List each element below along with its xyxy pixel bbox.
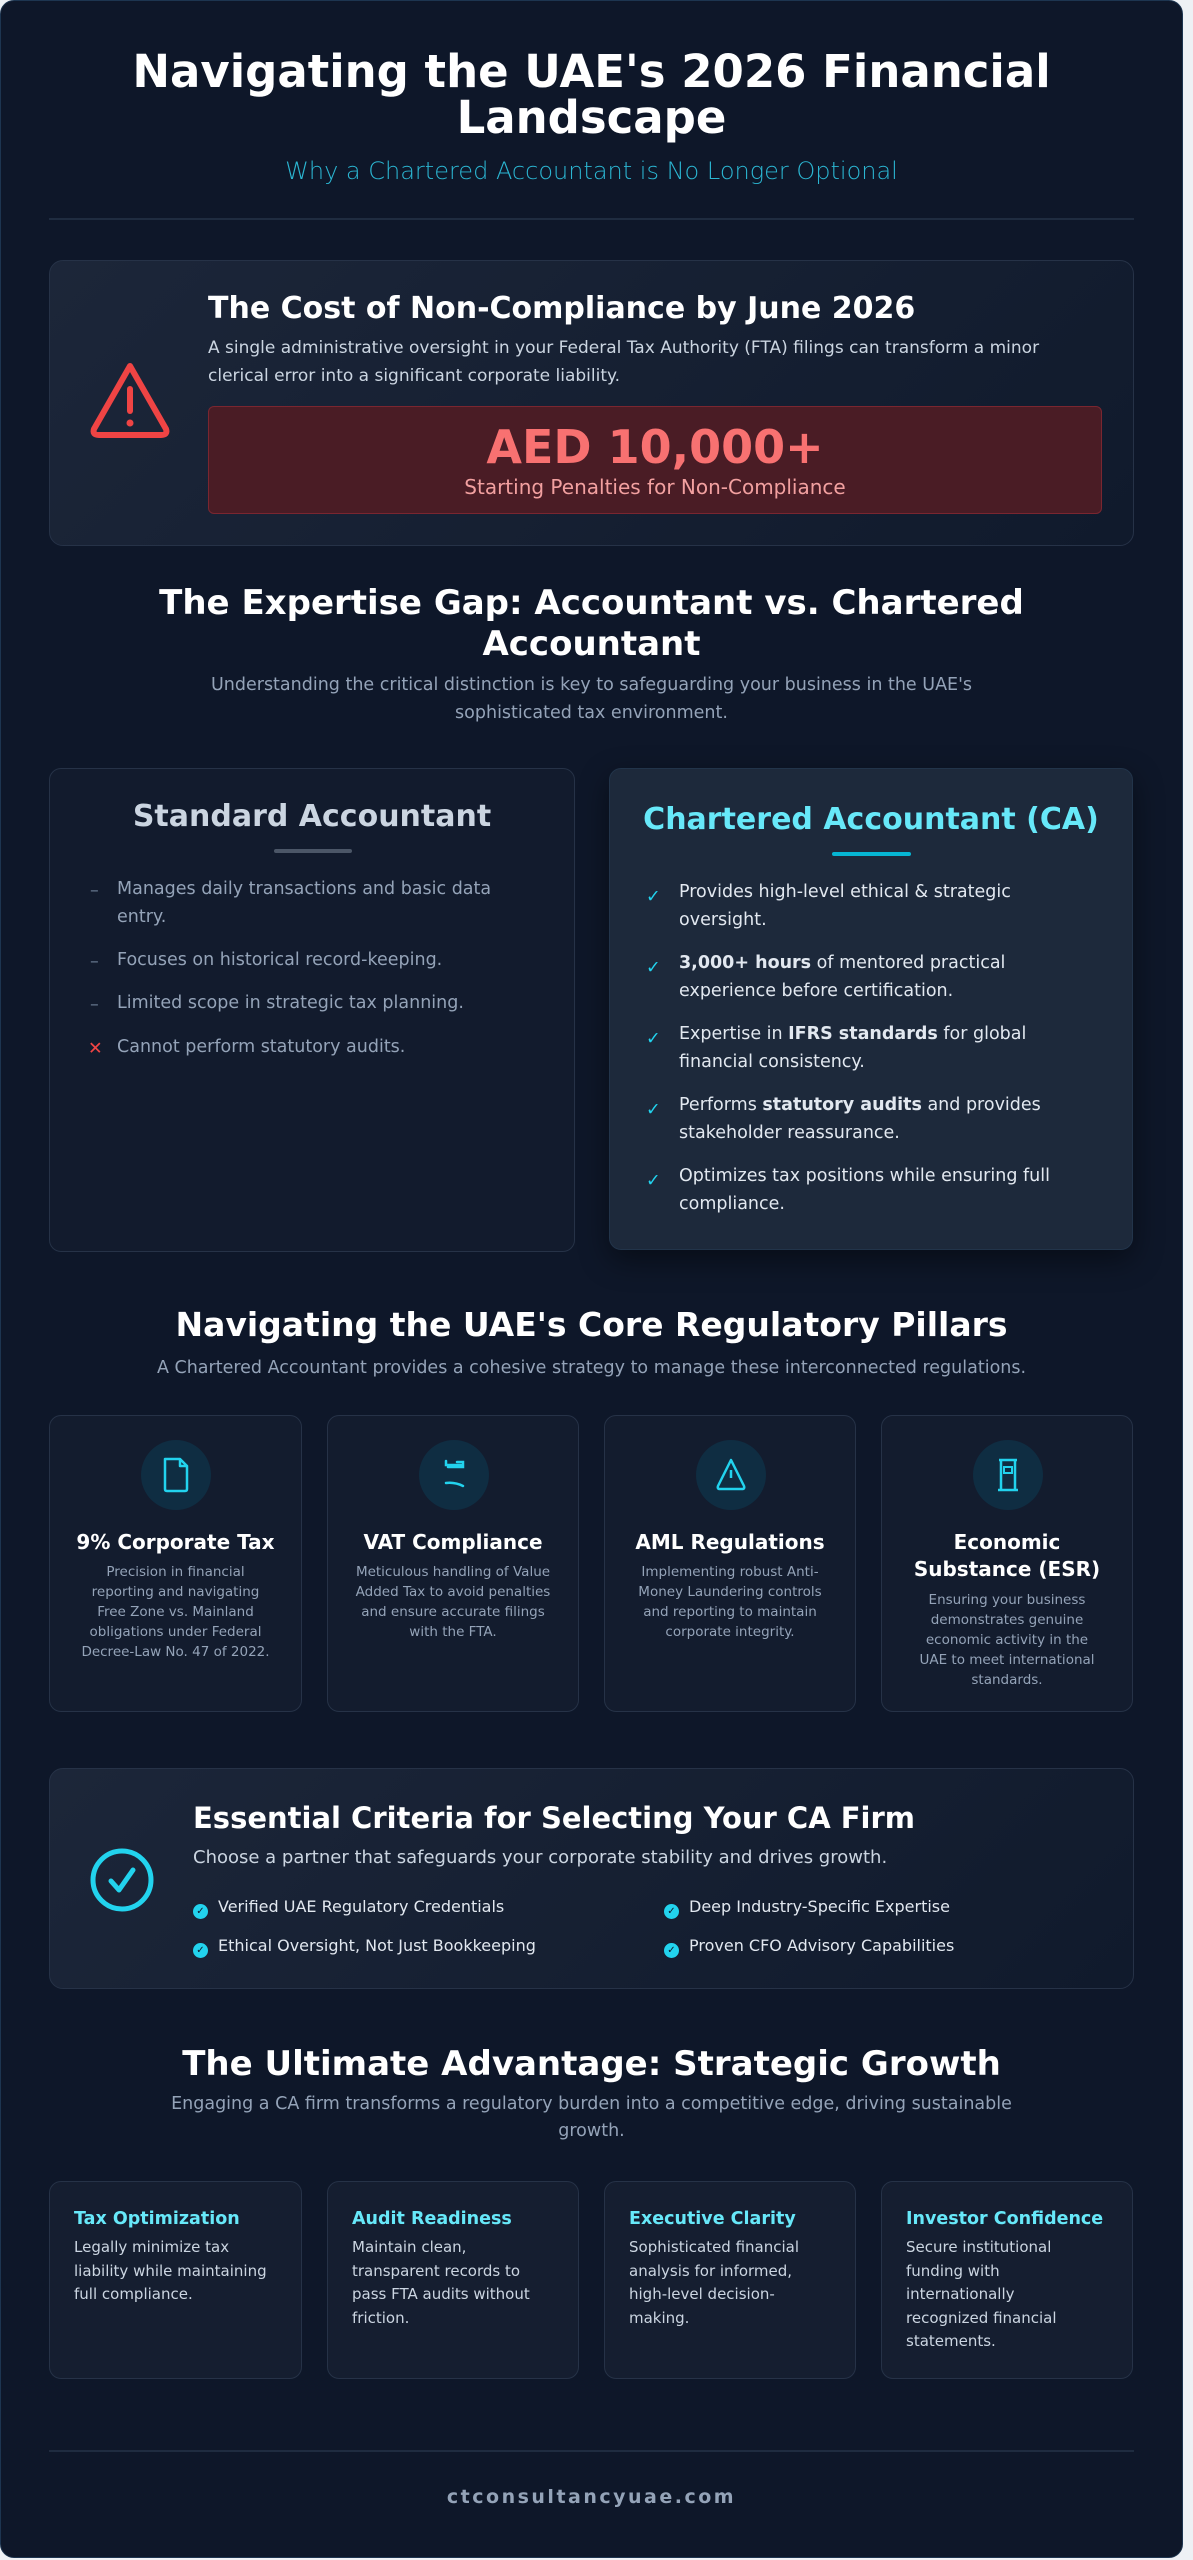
panel: audit readiness: Maintain clean, transparent records to pass FTA audits without friction. bbox=[352, 2238, 530, 2327]
panel: executive clarity: Sophisticated financial analysis for informed, high-level decision-making. bbox=[629, 2238, 799, 2327]
heading: Standard Accountant bbox=[133, 799, 491, 834]
list: ✓ bbox=[646, 1100, 661, 1120]
callout: penalty: Starting Penalties for Non-Compliance bbox=[464, 475, 846, 499]
list: Provides high-level ethical & strategic oversight. bbox=[679, 882, 1011, 930]
heading: Chartered Accountant (CA) bbox=[643, 802, 1099, 837]
list: Expertise in IFRS standards for global financial consistency. bbox=[679, 1024, 1026, 1072]
panel: tax optimization: Tax Optimization bbox=[74, 2209, 240, 2229]
panel: corporate tax: Decree-Law No. 47 of 2022. bbox=[81, 1644, 270, 1660]
heading: expertise gap bbox=[159, 583, 1024, 664]
criteria list: Verified UAE Regulatory Credentials bbox=[218, 1897, 504, 1916]
list: Cannot perform statutory audits. bbox=[117, 1037, 405, 1057]
criteria list: Ethical Oversight, Not Just Bookkeeping bbox=[218, 1936, 536, 1955]
list: Limited scope in strategic tax planning. bbox=[117, 993, 464, 1013]
panel: AML bbox=[604, 1415, 856, 1712]
list: ✓ bbox=[646, 1029, 661, 1049]
panel: corporate tax: obligations under Federal bbox=[90, 1624, 261, 1640]
list: 3,000+ hours of mentored practical experience before certification. bbox=[679, 953, 1005, 1001]
heading: expertise gap: The Expertise Gap: Accountant vs. Chartered bbox=[159, 583, 1024, 623]
list: Optimizes tax positions while ensuring full compliance. bbox=[679, 1166, 1050, 1214]
criteria list: ✓ bbox=[667, 1906, 676, 1917]
heading: The Cost of Non-Compliance by June 2026 bbox=[208, 291, 915, 326]
panel: investor confidence: Secure institutional funding with internationally recognized financial statements. bbox=[906, 2238, 1057, 2350]
panel: AML: AML Regulations bbox=[635, 1530, 825, 1554]
list: Performs statutory audits and provides stakeholder reassurance. bbox=[679, 1095, 1041, 1143]
panel: VAT: VAT Compliance bbox=[363, 1530, 543, 1554]
title bbox=[132, 45, 1051, 144]
panel: corporate tax: 9% Corporate Tax bbox=[76, 1530, 275, 1554]
list: Focuses on historical record-keeping. bbox=[117, 950, 442, 970]
panel: ESR: Substance (ESR) bbox=[914, 1557, 1100, 1581]
panel: ESR: Ensuring your business demonstrates genuine economic activity in the UAE to meet international standards. bbox=[919, 1592, 1095, 1688]
list: – bbox=[90, 881, 99, 901]
panel: audit readiness: Audit Readiness bbox=[352, 2209, 512, 2229]
criteria list: ✓ bbox=[196, 1945, 205, 1956]
subtitle: Why a Chartered Accountant is No Longer Optional bbox=[285, 157, 898, 185]
panel: investor confidence: Investor Confidence bbox=[906, 2209, 1103, 2229]
panel: investor confidence bbox=[881, 2181, 1133, 2379]
callout: penalty bbox=[208, 406, 1102, 514]
heading: Essential Criteria for Selecting Your CA Firm bbox=[193, 1801, 915, 1835]
panel: corporate tax: Free Zone vs. Mainland bbox=[97, 1604, 254, 1620]
list: Manages daily transactions and basic data entry. bbox=[117, 879, 491, 927]
title: Landscape bbox=[457, 91, 726, 144]
panel: VAT bbox=[327, 1415, 579, 1712]
icon: vat bbox=[419, 1440, 489, 1510]
list: ✓ bbox=[646, 887, 661, 907]
title: Navigating the UAE's 2026 Financial bbox=[132, 45, 1051, 98]
text block: A single administrative oversight in your Federal Tax Authority (FTA) filings can transform a minor clerical error into a significant corporate liability. bbox=[208, 338, 1039, 386]
text: growth subtitle: Engaging a CA firm transforms a regulatory burden into a competitive edge, driving sustainable growth. bbox=[171, 2094, 1012, 2141]
list: ✕ bbox=[88, 1039, 103, 1059]
panel: cost of non-compliance bbox=[49, 260, 1134, 546]
callout: penalty: AED 10,000+ bbox=[486, 420, 824, 474]
panel: corporate tax bbox=[49, 1415, 302, 1712]
list bbox=[646, 882, 1050, 1214]
icon: alert bbox=[696, 1440, 766, 1510]
text: pillars subtitle: A Chartered Accountant provides a cohesive strategy to manage these interconnected regulations. bbox=[157, 1358, 1026, 1378]
footer: ctconsultancyuae.com bbox=[447, 2486, 736, 2508]
panel: ESR: Economic bbox=[954, 1530, 1060, 1554]
panel: standard accountant bbox=[49, 768, 575, 1252]
heading: expertise gap: Accountant bbox=[482, 624, 701, 664]
panel: VAT: Meticulous handling of Value Added Tax to avoid penalties and ensure accurate filings with the FTA. bbox=[356, 1564, 550, 1640]
panel: executive clarity bbox=[604, 2181, 856, 2379]
panel: tax optimization bbox=[49, 2181, 302, 2379]
list: ✓ bbox=[646, 1171, 661, 1191]
list: – bbox=[90, 995, 99, 1015]
criteria list bbox=[193, 1897, 954, 1958]
criteria list: Proven CFO Advisory Capabilities bbox=[689, 1936, 954, 1955]
panel: ESR bbox=[881, 1415, 1133, 1712]
icon: check circle bbox=[90, 1848, 154, 1912]
panel: chartered accountant bbox=[609, 768, 1133, 1250]
panel: tax optimization: Legally minimize tax liability while maintaining full compliance. bbox=[74, 2238, 267, 2303]
criteria list: Deep Industry-Specific Expertise bbox=[689, 1897, 950, 1916]
text: expertise subtitle: Understanding the critical distinction is key to safeguarding your business in the UAE's sophisticated tax environment. bbox=[211, 675, 972, 723]
list bbox=[88, 879, 491, 1059]
heading: strategic growth: The Ultimate Advantage: Strategic Growth bbox=[182, 2044, 1001, 2084]
panel: AML: Implementing robust Anti-Money Laundering controls and reporting to maintain corporate integrity. bbox=[638, 1564, 822, 1640]
panel: executive clarity: Executive Clarity bbox=[629, 2209, 796, 2229]
list: ✓ bbox=[646, 958, 661, 978]
criteria list: ✓ bbox=[196, 1906, 205, 1917]
panel: essential criteria bbox=[49, 1768, 1134, 1989]
icon: warning triangle bbox=[90, 363, 170, 438]
criteria list: ✓ bbox=[667, 1945, 676, 1956]
heading: regulatory pillars: Navigating the UAE's Core Regulatory Pillars bbox=[175, 1305, 1008, 1344]
icon: document bbox=[141, 1440, 211, 1510]
list: – bbox=[90, 952, 99, 972]
text: Choose a partner that safeguards your corporate stability and drives growth. bbox=[193, 1847, 887, 1868]
panel: corporate tax: Precision in financial bbox=[106, 1564, 245, 1580]
panel: corporate tax: reporting and navigating bbox=[92, 1584, 259, 1600]
panel: audit readiness bbox=[327, 2181, 579, 2379]
icon: building bbox=[973, 1440, 1043, 1510]
